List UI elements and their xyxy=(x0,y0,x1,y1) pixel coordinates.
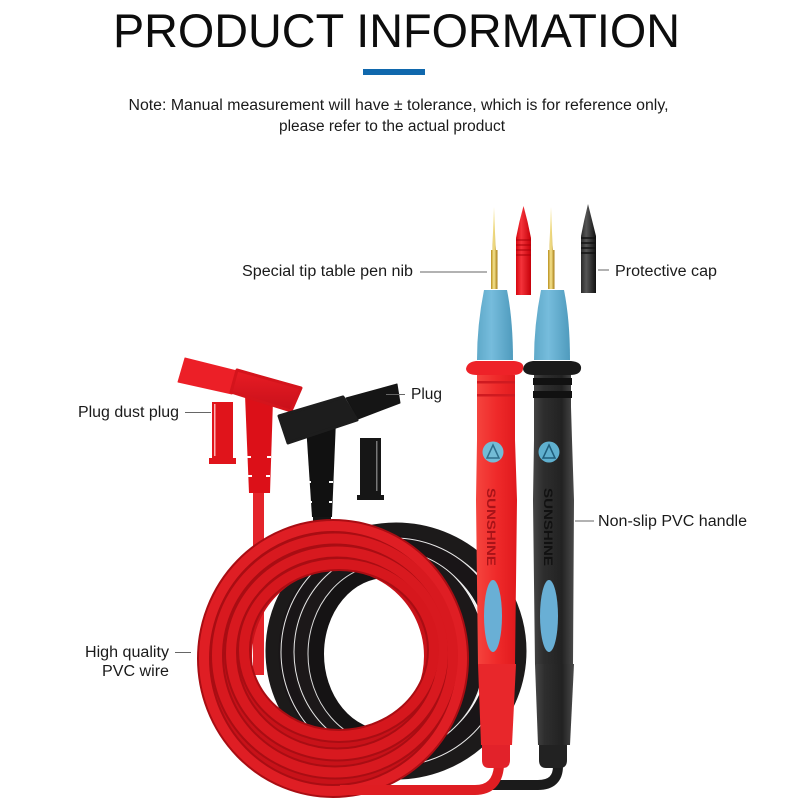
red pen badge xyxy=(482,442,504,462)
black pen lower barrel xyxy=(535,664,574,745)
red pen end xyxy=(482,745,510,768)
label: pen nib: Special tip table pen nib xyxy=(242,263,413,280)
label: plug dust plug: Plug dust plug xyxy=(78,404,179,421)
note text xyxy=(128,97,668,135)
red pen tip xyxy=(491,207,498,289)
red pen flange xyxy=(466,361,523,375)
label: handle: Non-slip PVC handle xyxy=(598,513,747,530)
red plug stem xyxy=(245,395,273,493)
red protective cap xyxy=(516,206,531,295)
red wire to plug xyxy=(253,490,264,675)
label: PVC wire xyxy=(85,644,191,680)
label: protective cap: Protective cap xyxy=(615,263,717,280)
note text: Note: Manual measurement will have ± tolerance, which is for reference only, xyxy=(128,97,668,114)
label: plug: Plug xyxy=(411,386,442,403)
label: PVC wire: PVC wire xyxy=(102,663,169,680)
black pen flange xyxy=(523,361,581,375)
black pen logo triangle xyxy=(543,445,555,458)
red pen logo triangle xyxy=(487,445,499,458)
label: plug xyxy=(386,386,442,403)
black pen ribs xyxy=(533,378,572,398)
label: PVC wire: High quality xyxy=(85,644,169,661)
red pen lower barrel xyxy=(478,664,516,745)
black banana plug xyxy=(279,384,400,517)
black plug housing xyxy=(279,397,357,443)
title: PRODUCT INFORMATION xyxy=(113,4,680,57)
red plug strain relief xyxy=(247,456,271,477)
red pen handle xyxy=(476,375,517,665)
note text: please refer to the actual product xyxy=(279,118,506,135)
black pen brand: SUNSHINE xyxy=(541,488,555,566)
black plug barrel xyxy=(346,384,400,419)
black pen tip xyxy=(548,207,554,289)
red pen blue cap xyxy=(477,290,513,360)
black pen end xyxy=(539,745,567,768)
red banana plug xyxy=(178,358,301,493)
red pen ribs xyxy=(477,381,515,396)
red test pen xyxy=(466,207,523,768)
red pen grip xyxy=(484,580,502,652)
black pen handle xyxy=(533,375,574,665)
red pen brand: SUNSHINE xyxy=(484,488,498,566)
black wire coil xyxy=(274,531,518,771)
black test pen xyxy=(523,207,581,768)
red plug barrel xyxy=(178,358,237,394)
red pen tail xyxy=(340,766,499,790)
black pen grip xyxy=(540,580,558,652)
black pen blue cap xyxy=(534,290,570,360)
red plug housing xyxy=(231,370,301,411)
black protective cap xyxy=(581,204,596,293)
black plug strain relief xyxy=(307,481,333,503)
black plug stem xyxy=(306,420,336,517)
black dust plug xyxy=(357,438,384,500)
red wire coil xyxy=(204,526,462,791)
black wire stub xyxy=(313,505,331,527)
black pen badge xyxy=(538,442,560,462)
black pen tail xyxy=(490,766,558,785)
red dust plug xyxy=(209,402,236,464)
accent bar xyxy=(363,69,425,75)
